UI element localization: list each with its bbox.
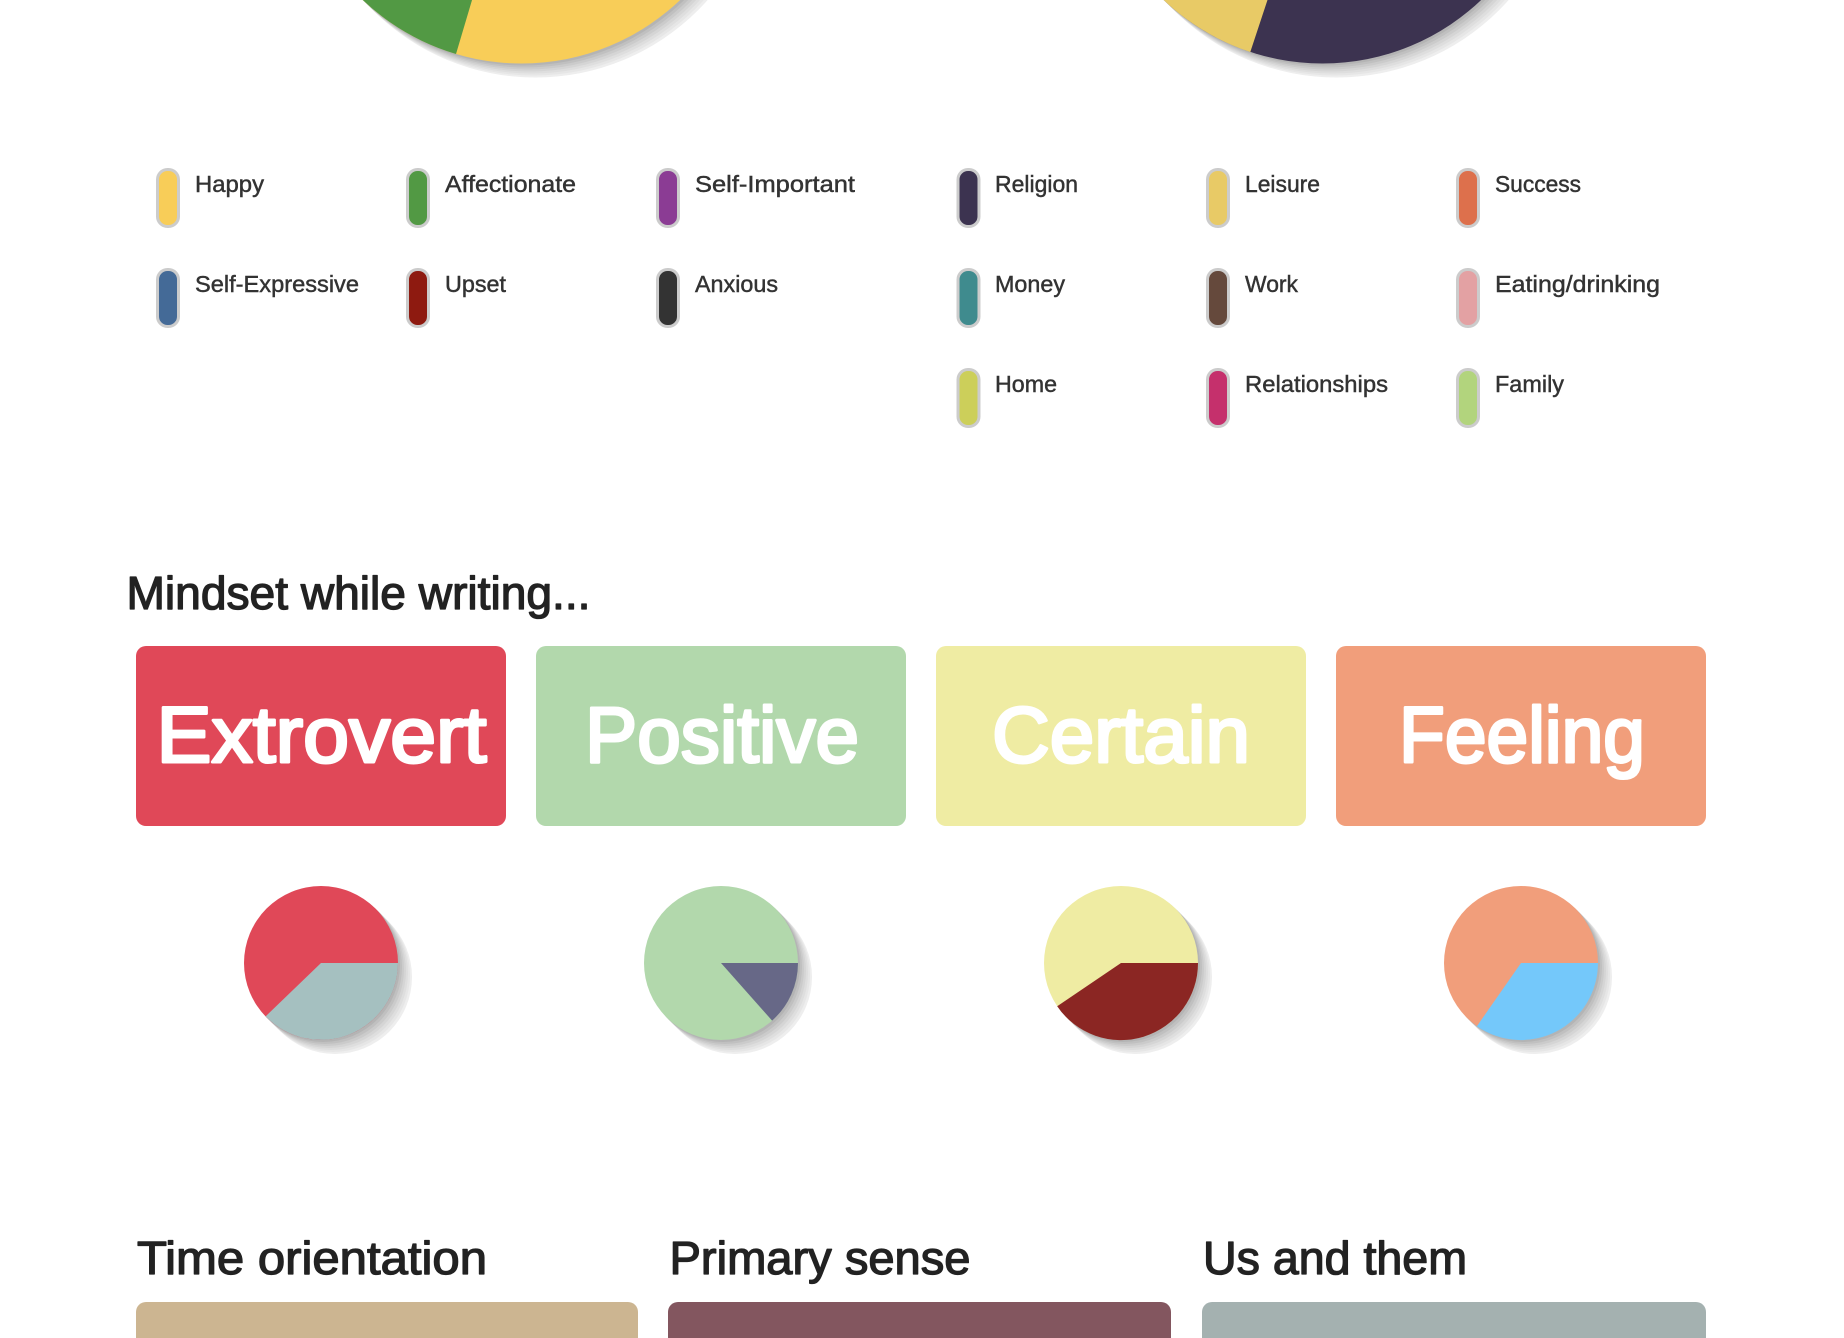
- legend item: Self-Important: [658, 170, 856, 226]
- legend item: Money: Money: [995, 271, 1065, 297]
- legend item: Affectionate: Affectionate: [445, 171, 576, 197]
- legend item: Eating/drinking: [1458, 270, 1660, 326]
- legend item: Anxious: Anxious: [695, 271, 778, 297]
- panel: Us and them (cropped): [1202, 1302, 1706, 1338]
- legend item: Eating/drinking: Eating/drinking: [1495, 271, 1660, 297]
- card: Certain: [936, 646, 1306, 826]
- card: Feeling: Feeling: [1399, 690, 1645, 779]
- legend item: Affectionate: [408, 170, 576, 226]
- legend item: Success: [1458, 170, 1581, 226]
- legend item: Relationships: [1208, 370, 1388, 426]
- pie chart: Certain: [1044, 886, 1212, 1054]
- legend: topics: [958, 170, 1660, 426]
- legend item: Family: Family: [1495, 371, 1564, 397]
- legend item: Work: Work: [1245, 271, 1298, 297]
- card: Extrovert: [136, 646, 506, 826]
- legend item: Happy: Happy: [195, 171, 265, 197]
- pie chart: emotions (cropped top): [292, 0, 766, 78]
- panel: Time orientation (cropped): [136, 1302, 638, 1338]
- legend item: Work: [1208, 270, 1298, 326]
- legend item: Happy: [158, 170, 265, 226]
- card: Extrovert: Extrovert: [156, 690, 487, 779]
- legend item: Money: [958, 270, 1065, 326]
- pie chart: Feeling: [1444, 886, 1612, 1054]
- legend item: Religion: [958, 170, 1078, 226]
- legend item: Home: Home: [995, 371, 1057, 397]
- legend item: Religion: Religion: [995, 171, 1078, 197]
- legend item: Home: [958, 370, 1057, 426]
- legend item: Self-Expressive: Self-Expressive: [195, 271, 359, 297]
- card: Certain: Certain: [992, 690, 1250, 779]
- legend item: Upset: [408, 270, 507, 326]
- legend item: Leisure: [1208, 170, 1320, 226]
- legend item: Self-Important: Self-Important: [695, 171, 856, 197]
- legend: emotions: [158, 170, 856, 326]
- heading: Primary sense: Primary sense: [670, 1232, 970, 1284]
- legend item: Anxious: [658, 270, 778, 326]
- legend item: Relationships: Relationships: [1245, 371, 1388, 397]
- heading: Us and them: Us and them: [1203, 1232, 1467, 1284]
- panel: Primary sense (cropped): [668, 1302, 1171, 1338]
- card: Feeling: [1336, 646, 1706, 826]
- heading: Time orientation: Time orientation: [137, 1232, 487, 1284]
- legend item: Success: Success: [1495, 171, 1581, 197]
- legend item: Self-Expressive: [158, 270, 359, 326]
- card: Positive: [536, 646, 906, 826]
- pie chart: topics (cropped top): [1092, 0, 1566, 78]
- card: Positive: Positive: [585, 690, 859, 779]
- legend item: Upset: Upset: [445, 271, 507, 297]
- pie chart: Extrovert: [244, 886, 412, 1054]
- legend item: Leisure: Leisure: [1245, 171, 1320, 197]
- heading: Mindset while writing: Mindset while writing...: [126, 567, 590, 619]
- legend item: Family: [1458, 370, 1564, 426]
- pie chart: Positive: [644, 886, 812, 1054]
